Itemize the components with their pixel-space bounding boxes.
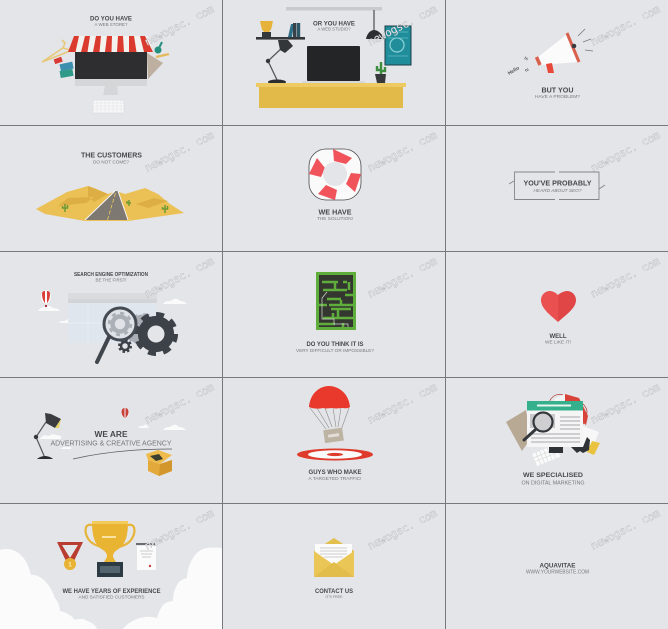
icon: certificate	[136, 543, 156, 570]
watermark: newogsc. com	[142, 254, 216, 301]
heading: YOU'VE PROBABLY	[524, 180, 592, 188]
panel: do you think it is very difficult	[296, 254, 439, 353]
watermark: newogsc. com	[588, 128, 662, 175]
icon: clouds	[59, 299, 187, 323]
subheading: A WEB STUDIO?	[318, 26, 351, 32]
icon: clouds left	[0, 549, 97, 629]
icon: blueprint poster	[385, 26, 411, 65]
icon: parcel	[323, 428, 344, 443]
heading: GUYS WHO MAKE	[308, 470, 362, 476]
icon: paper and pencil	[578, 426, 600, 455]
icon: awning	[68, 36, 153, 52]
heading: DO YOU THINK IT IS	[306, 342, 364, 348]
icon: monitor	[75, 52, 147, 79]
subheading: AND SATISFIED CUSTOMERS	[78, 594, 144, 600]
heading: CONTACT US	[315, 588, 354, 595]
icon: hello sound text	[507, 55, 530, 77]
subheading: HEARD ABOUT SEO?	[534, 188, 582, 193]
panel: we are advertising and creative agency	[34, 380, 216, 476]
icon: hello sound text: Hello	[507, 65, 521, 77]
icon: dark gears	[549, 437, 590, 453]
subheading: WE LIKE IT!	[545, 340, 571, 344]
icon: cactus	[375, 62, 386, 83]
subheading: IT'S FREE	[326, 594, 343, 599]
icon: desert hills	[36, 186, 184, 221]
icon: shelf	[256, 37, 305, 40]
icon: clouds	[39, 424, 186, 449]
icon: pendant lamp	[366, 10, 384, 39]
watermark: newogsc. com	[365, 380, 439, 427]
icon: large gray gear	[128, 314, 158, 346]
icon: medal: 1	[68, 562, 72, 568]
icon: browser page	[527, 401, 583, 447]
panel: well we like it	[541, 254, 662, 344]
icon: desk lamp	[266, 40, 293, 84]
heading: WE HAVE	[318, 210, 352, 216]
icon: maze	[316, 272, 356, 330]
watermark: newogsc. com	[142, 2, 216, 49]
icon: road	[85, 191, 128, 220]
icon: balloon	[121, 408, 129, 418]
icon: trophy	[260, 21, 273, 37]
heading: THE CUSTOMERS	[81, 152, 142, 160]
icon: hello sound text: hi	[524, 55, 529, 61]
subheading: ON DIGITAL MARKETING	[522, 480, 584, 486]
watermark: newogsc. com	[142, 380, 216, 427]
heading: WE ARE	[94, 430, 128, 439]
heading: WE HAVE YEARS OF EXPERIENCE	[62, 588, 160, 595]
panel: guys who make a targeted traffic	[297, 380, 439, 482]
icon: books	[288, 23, 300, 37]
icon: desk	[256, 83, 406, 108]
watermark: newogsc. com	[588, 380, 662, 427]
subheading: BE THE FIRST!	[96, 278, 126, 282]
heading: OR YOU HAVE	[313, 20, 356, 28]
watermark: newogsc. com	[588, 254, 662, 301]
icon: clothes hanger	[42, 40, 70, 62]
icon: shopping bag and baguette	[147, 42, 169, 79]
watermark: newogsc. com	[142, 506, 216, 553]
watermark: newogsc. com	[365, 128, 439, 175]
panel: contact us	[314, 506, 439, 599]
callout frame	[509, 172, 605, 200]
icon: dark gear	[136, 314, 176, 354]
panel: aquavitae	[526, 506, 662, 576]
icon: parachute strings	[310, 408, 349, 430]
icon: keyboard	[93, 100, 124, 113]
heading: SEARCH ENGINE OPTIMIZATION	[74, 272, 148, 278]
heading: AQUAVITAE	[540, 564, 576, 570]
panel: we have the solution	[309, 128, 439, 221]
panel: search engine optimization	[38, 254, 216, 362]
watermark: newogsc. com	[588, 506, 662, 553]
icon: laptop	[302, 46, 365, 83]
subheading: A TARGETED TRAFFIC!	[308, 476, 362, 482]
panel: the customers do not come	[36, 128, 216, 221]
icon: small gear	[119, 340, 131, 352]
watermark: newogsc. com	[588, 2, 662, 49]
watermark: newogsc. com	[365, 2, 439, 49]
panel: do you have a web store	[42, 2, 216, 113]
panel: we have years of experience	[0, 506, 222, 629]
icon: clouds right	[123, 548, 222, 629]
icon: trophy	[86, 521, 134, 577]
subheading: VERY DIFFICULT OR IMPOSSIBLE?	[296, 348, 375, 353]
icon: red cable and tag	[549, 394, 588, 425]
icon: open box	[146, 450, 172, 476]
icon: parachute canopy	[309, 386, 350, 409]
icon: envelope	[314, 538, 354, 577]
icon: cacti	[62, 200, 168, 213]
panel: but you have a problem	[507, 2, 662, 99]
watermark: newogsc. com	[142, 128, 216, 175]
watermark: newogsc. com	[365, 506, 439, 553]
subheading: WWW.YOURWEBSITE.COM	[526, 570, 589, 576]
heading: DO YOU HAVE	[90, 16, 133, 22]
watermark: newogsc. com	[365, 254, 439, 301]
icon: price tags	[54, 57, 74, 78]
icon: desk lamp	[34, 413, 61, 459]
icon: monitor shadow and stand	[75, 79, 147, 95]
icon: heart	[541, 291, 576, 322]
icon: keyboard	[532, 445, 560, 466]
subheading: HAVE A PROBLEM?	[535, 94, 581, 99]
icon: balloon and cloud	[38, 290, 60, 311]
subheading: ADVERTISING & CREATIVE AGENCY	[50, 440, 172, 448]
icon: magnifier	[524, 412, 552, 440]
subheading: DO NOT COME?	[93, 160, 130, 164]
heading: WE SPECIALISED	[523, 472, 583, 479]
icon: shopping bag	[506, 410, 531, 451]
panel: or you have a web studio	[256, 2, 439, 108]
curve line	[73, 449, 172, 459]
icon: megaphone	[536, 29, 593, 73]
subheading: A WEB STORE?	[94, 22, 128, 27]
icon: medal	[57, 542, 83, 570]
panel: we specialised on digital marketing	[506, 380, 662, 486]
icon: life ring	[309, 149, 361, 200]
subheading: THE SOLUTION!	[317, 216, 353, 221]
heading: WELL	[550, 333, 567, 340]
icon: browser window	[68, 293, 157, 343]
icon: target	[297, 448, 373, 460]
icon: wall bar	[286, 7, 382, 10]
heading: BUT YOU	[542, 88, 574, 94]
icon: magnifier	[97, 308, 136, 362]
icon: hello sound text: hi	[524, 67, 530, 73]
panel: you've probably heard about seo	[509, 128, 662, 200]
